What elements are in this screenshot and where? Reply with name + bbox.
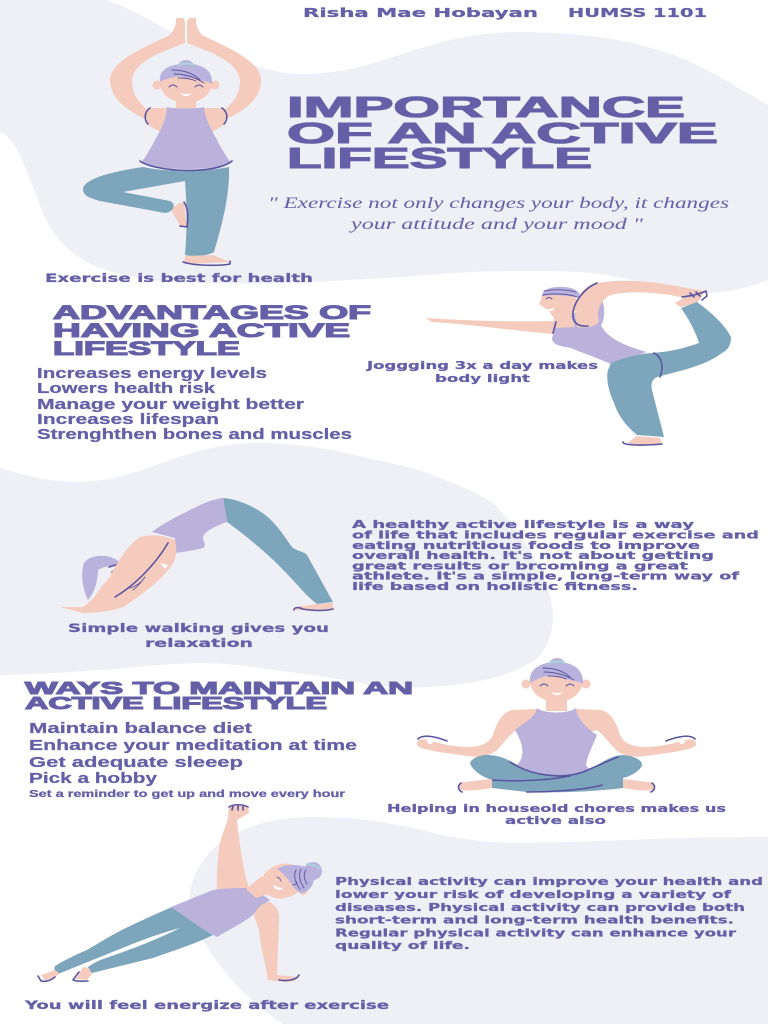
author line: HUMSS 1101: [568, 6, 707, 20]
author line: Risha Mae Hobayan: [303, 6, 538, 20]
paragraph: physical activity: [335, 875, 763, 952]
heading: advantages: HAVING ACTIVE: [53, 321, 350, 342]
tank top: [152, 498, 227, 553]
figure: side plank: [38, 805, 322, 982]
paragraph: physical activity: quality of life.: [335, 939, 470, 952]
leggings: [223, 498, 333, 604]
hands: [418, 736, 695, 744]
arms and head: [60, 535, 176, 613]
caption: jogging: body light: [435, 372, 530, 385]
title: OF AN ACTIVE: [287, 118, 718, 150]
caption: chores: [387, 802, 727, 827]
paragraph: healthy active lifestyle: great results or brcoming a great: [352, 560, 688, 572]
heading: ways to maintain: WAYS TO MAINTAIN AN: [25, 678, 413, 698]
heading: advantages: ADVANTAGES OF: [53, 303, 371, 324]
caption: chores: Helping in houseold chores makes us: [387, 802, 727, 815]
tank top: [171, 888, 270, 937]
caption: energize: You will feel energize after exercise: [23, 998, 389, 1012]
paragraph: healthy active lifestyle: life based on holistic fitness.: [352, 581, 638, 593]
arms raised: [110, 18, 261, 119]
paragraph: physical activity: Regular physical activity can enhance your: [335, 926, 737, 940]
figure: downward dog: [60, 498, 333, 613]
leggings: [83, 167, 229, 256]
feet: [172, 202, 187, 227]
list: ways to maintain: Maintain balance diet: [29, 720, 252, 737]
leggings: [607, 302, 731, 437]
background blob: bottom right: [189, 817, 768, 1024]
arm left: [417, 709, 537, 757]
list: ways to maintain: [29, 720, 357, 800]
legs: [470, 755, 642, 792]
quote: " Exercise not only changes your body, it changes: [268, 195, 729, 212]
tank top: [141, 107, 231, 169]
extended arm: [426, 318, 556, 334]
list: ways to maintain: Set a reminder to get up and move every hour: [29, 789, 345, 800]
list: advantages: Lowers health risk: [37, 380, 216, 397]
heading: advantages: LIFESTYLE: [53, 339, 240, 360]
raised arm: [575, 281, 704, 327]
paragraph: physical activity: diseases. Physical activity can provide both: [335, 901, 745, 914]
heading: advantages: [53, 303, 371, 360]
caption: jogging: [366, 359, 599, 385]
supporting arm: [254, 902, 298, 982]
heading: ways to maintain: ACTIVE LIFESTYLE: [25, 693, 327, 713]
caption: walking: [68, 621, 329, 650]
caption: jogging: Joggging 3x a day makes: [366, 359, 599, 372]
caption: chores: active also: [505, 814, 607, 827]
head: [246, 859, 322, 903]
feet: [38, 967, 92, 981]
caption: exercise: Exercise is best for health: [45, 271, 313, 285]
figure: tree pose: [83, 18, 261, 265]
list: advantages: Increases lifespan: [37, 411, 219, 428]
feet: [458, 779, 655, 792]
caption: walking: Simple walking gives you: [68, 621, 329, 635]
list: advantages: Manage your weight better: [37, 396, 304, 413]
background blob: middle: [0, 443, 553, 688]
list: advantages: Increases energy levels: [37, 365, 267, 382]
list: ways to maintain: Get adequate sleeep: [29, 754, 243, 771]
tank top: [552, 296, 647, 364]
back foot: [296, 603, 333, 610]
leggings: [54, 907, 213, 974]
paragraph: healthy active lifestyle: of life that includes regular exercise and: [352, 530, 759, 542]
raised arm: [217, 806, 249, 891]
paragraph: healthy active lifestyle: [352, 519, 759, 593]
tank top: [515, 708, 597, 777]
arm right: [576, 709, 696, 757]
figure: dancer pose: [426, 281, 731, 445]
paragraph: healthy active lifestyle: eating nutritious foods to improve: [352, 540, 700, 552]
paragraph: healthy active lifestyle: athlete. It's a simple, long-term way of: [352, 570, 740, 582]
list: ways to maintain: Enhance your meditation at time: [29, 737, 357, 754]
author line: [303, 6, 707, 20]
paragraph: healthy active lifestyle: A healthy active lifestyle is a way: [352, 519, 694, 531]
quote: your attitude and your mood ": [348, 216, 643, 233]
quote: [268, 195, 729, 233]
standing foot: [628, 436, 662, 445]
hair: [82, 556, 120, 600]
title: [287, 92, 718, 175]
paragraph: physical activity: short-term and long-term health benefits.: [335, 914, 734, 926]
hand and foot: [675, 295, 702, 307]
list: advantages: [37, 365, 352, 443]
list: ways to maintain: Pick a hobby: [29, 770, 158, 787]
paragraph: physical activity: Physical activity can improve your health and: [335, 875, 763, 888]
head: [539, 287, 580, 328]
title: IMPORTANCE: [287, 92, 685, 124]
list: advantages: Strenghthen bones and muscles: [37, 426, 352, 443]
caption: walking: relaxation: [145, 636, 253, 650]
heading: ways to maintain: [25, 678, 413, 713]
title: LIFESTYLE: [287, 143, 592, 175]
head: [522, 658, 590, 711]
shoulders: [147, 108, 225, 132]
paragraph: physical activity: lower your risk of developing a variety of: [335, 888, 731, 901]
paragraph: healthy active lifestyle: overall health. It's not about getting: [352, 550, 714, 562]
figure: seated meditation: [417, 658, 696, 792]
head: [152, 60, 220, 109]
background blob: top: [0, 0, 768, 293]
